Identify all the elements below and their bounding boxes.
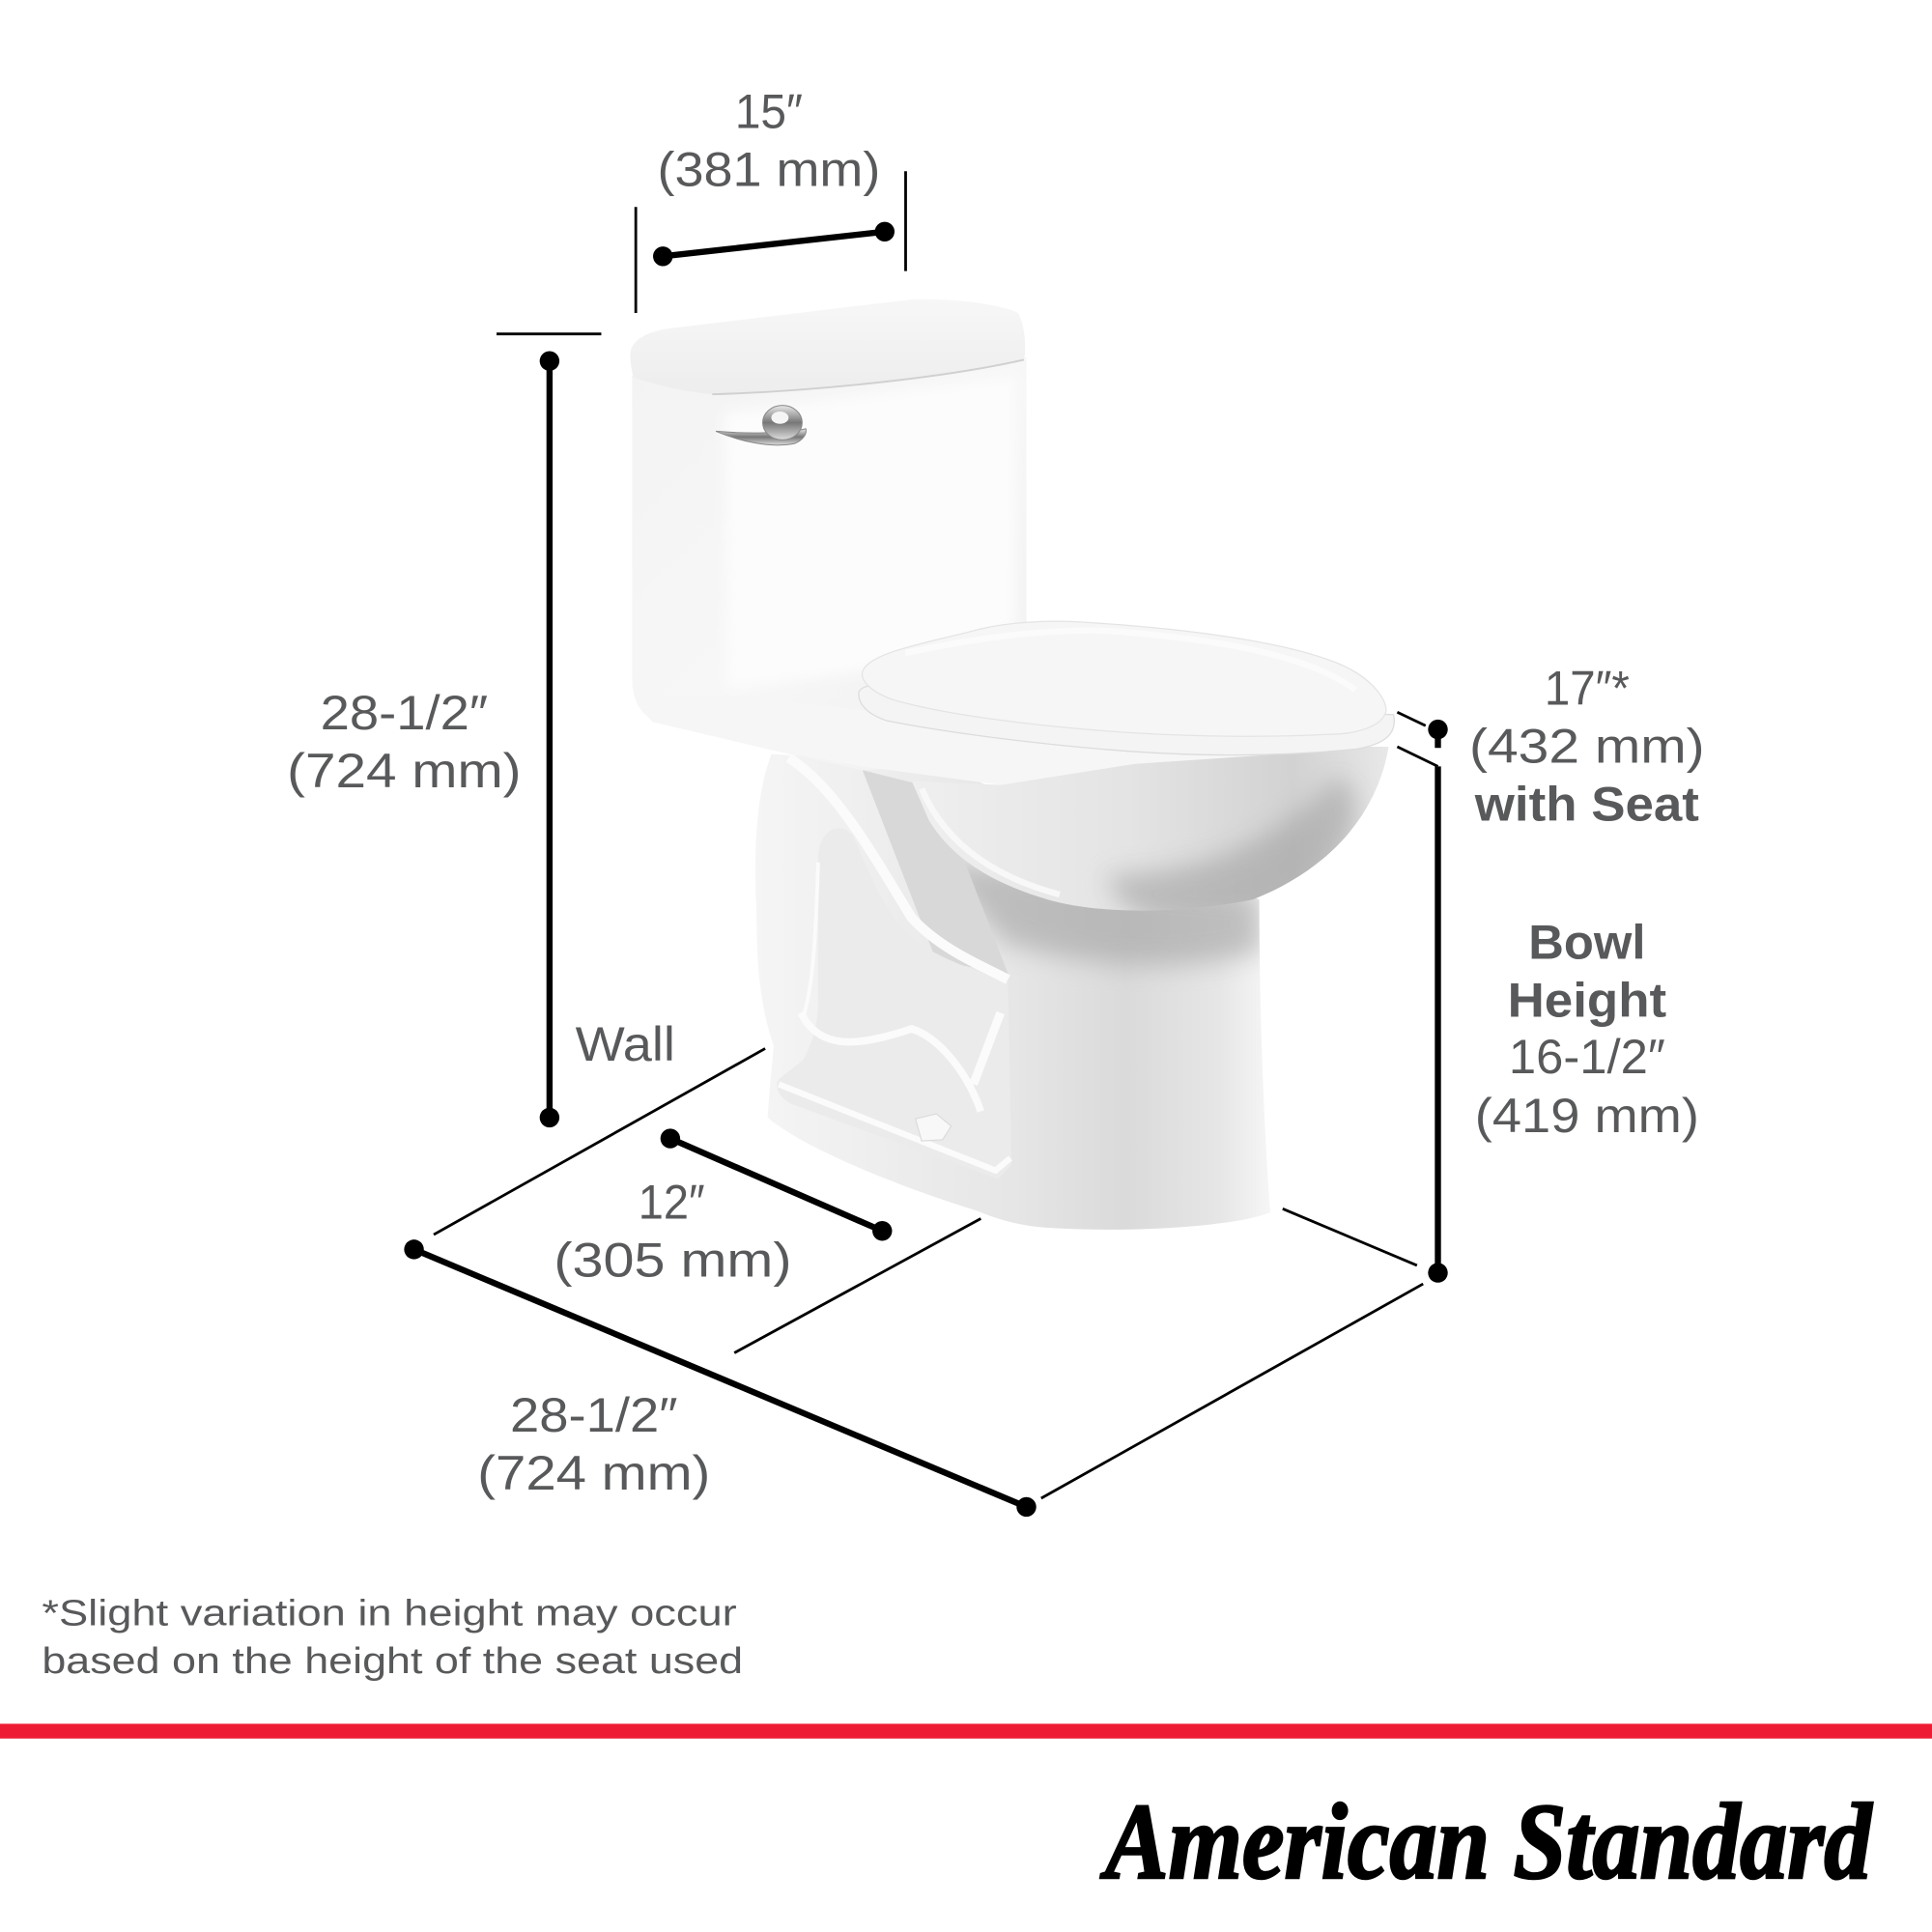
seat lid: [863, 621, 1386, 736]
dimension: bowl height: [1283, 662, 1705, 1283]
bowl height label: 16-1/2″: [1509, 1030, 1665, 1084]
tank body: [632, 357, 1026, 770]
trapway inner panel: [777, 828, 1011, 1179]
tank width label: 15″: [735, 85, 803, 139]
depth label: (724 mm): [477, 1446, 710, 1500]
bowl height witness lines: [1283, 712, 1438, 1265]
red divider bar: [0, 1723, 1932, 1739]
bowl height label: (419 mm): [1475, 1089, 1699, 1143]
rough-in witness lines: [434, 1048, 980, 1353]
depth witness lines: [1041, 1284, 1423, 1498]
depth measure line: [404, 1239, 1037, 1517]
flange cap: [916, 1114, 952, 1141]
bowl height label: Bowl: [1528, 915, 1645, 969]
rough-in label: (305 mm): [554, 1233, 792, 1287]
tank width witness lines: [636, 171, 906, 313]
flush handle: [716, 406, 806, 445]
height witness line: [497, 333, 601, 335]
dimension: tank width 15 in: [636, 85, 906, 313]
bowl height label: Height: [1508, 973, 1666, 1027]
footnote: *Slight variation in height may occur: [42, 1592, 737, 1634]
dimension: overall depth: [404, 1239, 1423, 1517]
rough-in label: 12″: [639, 1175, 705, 1229]
footnote: based on the height of the seat used: [42, 1640, 743, 1682]
deck: [640, 696, 1282, 784]
tank width label: [657, 85, 880, 197]
rough-in label: [554, 1175, 792, 1287]
seat height label: [1469, 662, 1705, 831]
dimension: rough-in 12 in: [434, 1048, 980, 1353]
tank width measure line: [653, 222, 895, 267]
seat height label: 17″*: [1545, 662, 1630, 716]
depth label: 28-1/2″: [510, 1388, 678, 1442]
footnote: [42, 1592, 743, 1682]
height label: 28-1/2″: [321, 686, 488, 740]
bowl height measure line: [1428, 720, 1448, 1283]
dimension: overall height: [287, 334, 601, 1127]
seat height label: with Seat: [1474, 777, 1699, 831]
tank lid: [631, 299, 1025, 394]
seat height label: (432 mm): [1469, 720, 1705, 774]
height label: (724 mm): [287, 744, 522, 798]
tank recess highlight: [724, 376, 1016, 690]
height measure line: [540, 352, 559, 1127]
bowl height label: [1475, 915, 1699, 1143]
bowl: [912, 747, 1389, 925]
tank width label: (381 mm): [657, 143, 880, 197]
height label: [287, 686, 522, 798]
toilet base and pedestal: [755, 754, 1270, 1230]
rough-in measure line: [661, 1128, 892, 1240]
trapway moulded ribs: [779, 757, 1010, 1171]
wall label: Wall: [576, 1017, 675, 1071]
seat ring: [859, 686, 1394, 755]
depth label: [477, 1388, 710, 1500]
toilet product image: [631, 299, 1394, 1230]
